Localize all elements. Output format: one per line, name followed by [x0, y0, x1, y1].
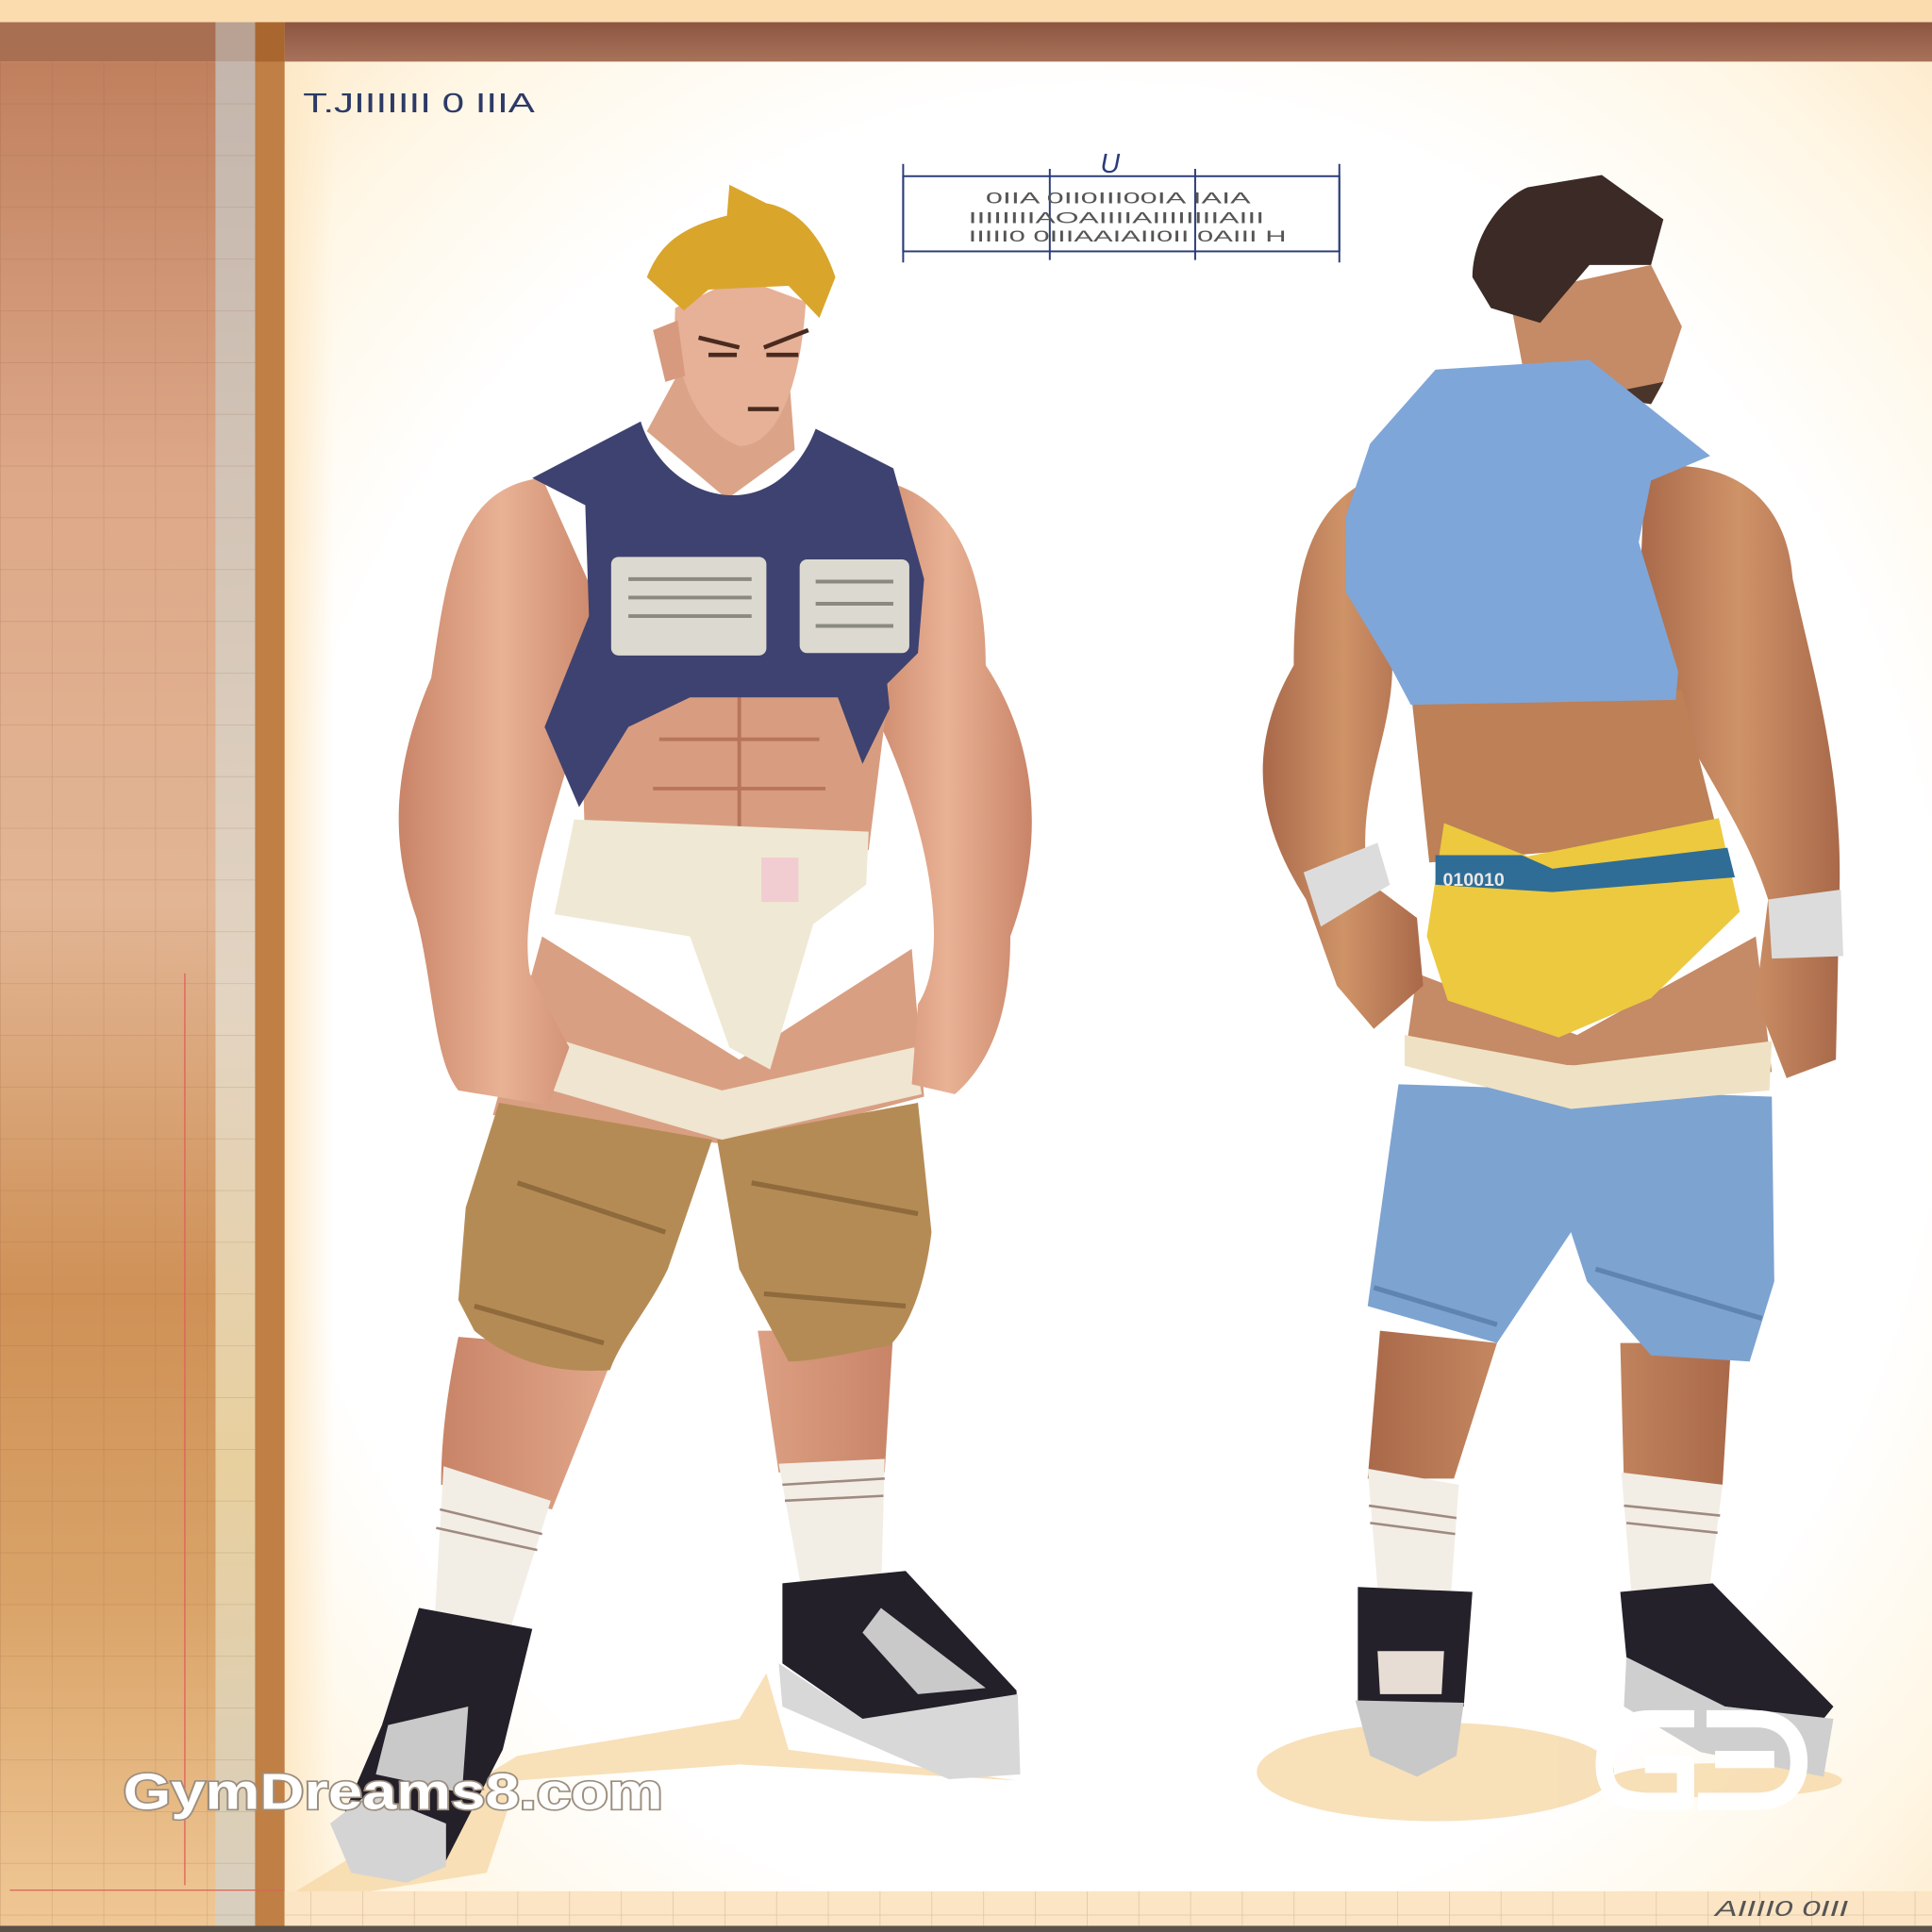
front thigh bands [552, 1041, 922, 1140]
back wristbands [1304, 842, 1843, 958]
table: title block [903, 149, 1340, 262]
back neck and head [1509, 265, 1682, 404]
ground shadows [295, 1674, 1842, 1891]
table: title block: 0IIA 0II0III00IA IAIA [986, 190, 1252, 208]
front eyes and mouth [699, 330, 808, 409]
back torso [1411, 690, 1719, 862]
back arms and hands [1263, 466, 1840, 1078]
back right shoe [1621, 1583, 1834, 1776]
table: title block: IIIII0 0IIIAAIAII0II 0AIII H [969, 227, 1287, 245]
table: title block: U [1100, 149, 1120, 179]
front upper legs [492, 937, 924, 1146]
front underwear [555, 820, 869, 1070]
heading: sheet title: T.JIIIIIII 0 IIIA [303, 89, 536, 119]
front tank top [532, 422, 924, 808]
front arms and hands [399, 478, 1032, 1106]
panel: bottom ruled strip [0, 1891, 1932, 1932]
bottom right mark: AIIII0 0III [1712, 1896, 1849, 1921]
table: title block: IIIIIIIIAOAIIIIAIIIIIIIIAIII [969, 208, 1264, 226]
front chest labels [611, 557, 909, 656]
panel: top bar [0, 0, 1932, 61]
back socks [1368, 1469, 1723, 1621]
front left shoe [330, 1607, 532, 1883]
front socks [434, 1458, 885, 1645]
back thigh band [1405, 1035, 1772, 1109]
watermark: website: GymDreams8.com [124, 1764, 663, 1820]
back briefs [1426, 818, 1740, 1038]
back upper legs [1405, 937, 1772, 1072]
panel: left ruled strip [0, 23, 285, 1932]
front lower legs [441, 1331, 893, 1509]
back left shoe [1356, 1587, 1473, 1776]
logo: GD [1605, 1719, 1799, 1802]
back shorts [1368, 1084, 1774, 1361]
back briefs: 010010 [1442, 870, 1505, 891]
figure: back view character [1263, 175, 1843, 1776]
front hair [647, 185, 836, 318]
back vest [1345, 359, 1710, 705]
front neck and head [647, 277, 806, 499]
back hair [1473, 175, 1663, 323]
front shorts [458, 1103, 931, 1371]
front right shoe [778, 1571, 1020, 1779]
figure: front view character [330, 185, 1032, 1883]
back lower legs [1368, 1331, 1731, 1485]
front torso [579, 653, 893, 850]
